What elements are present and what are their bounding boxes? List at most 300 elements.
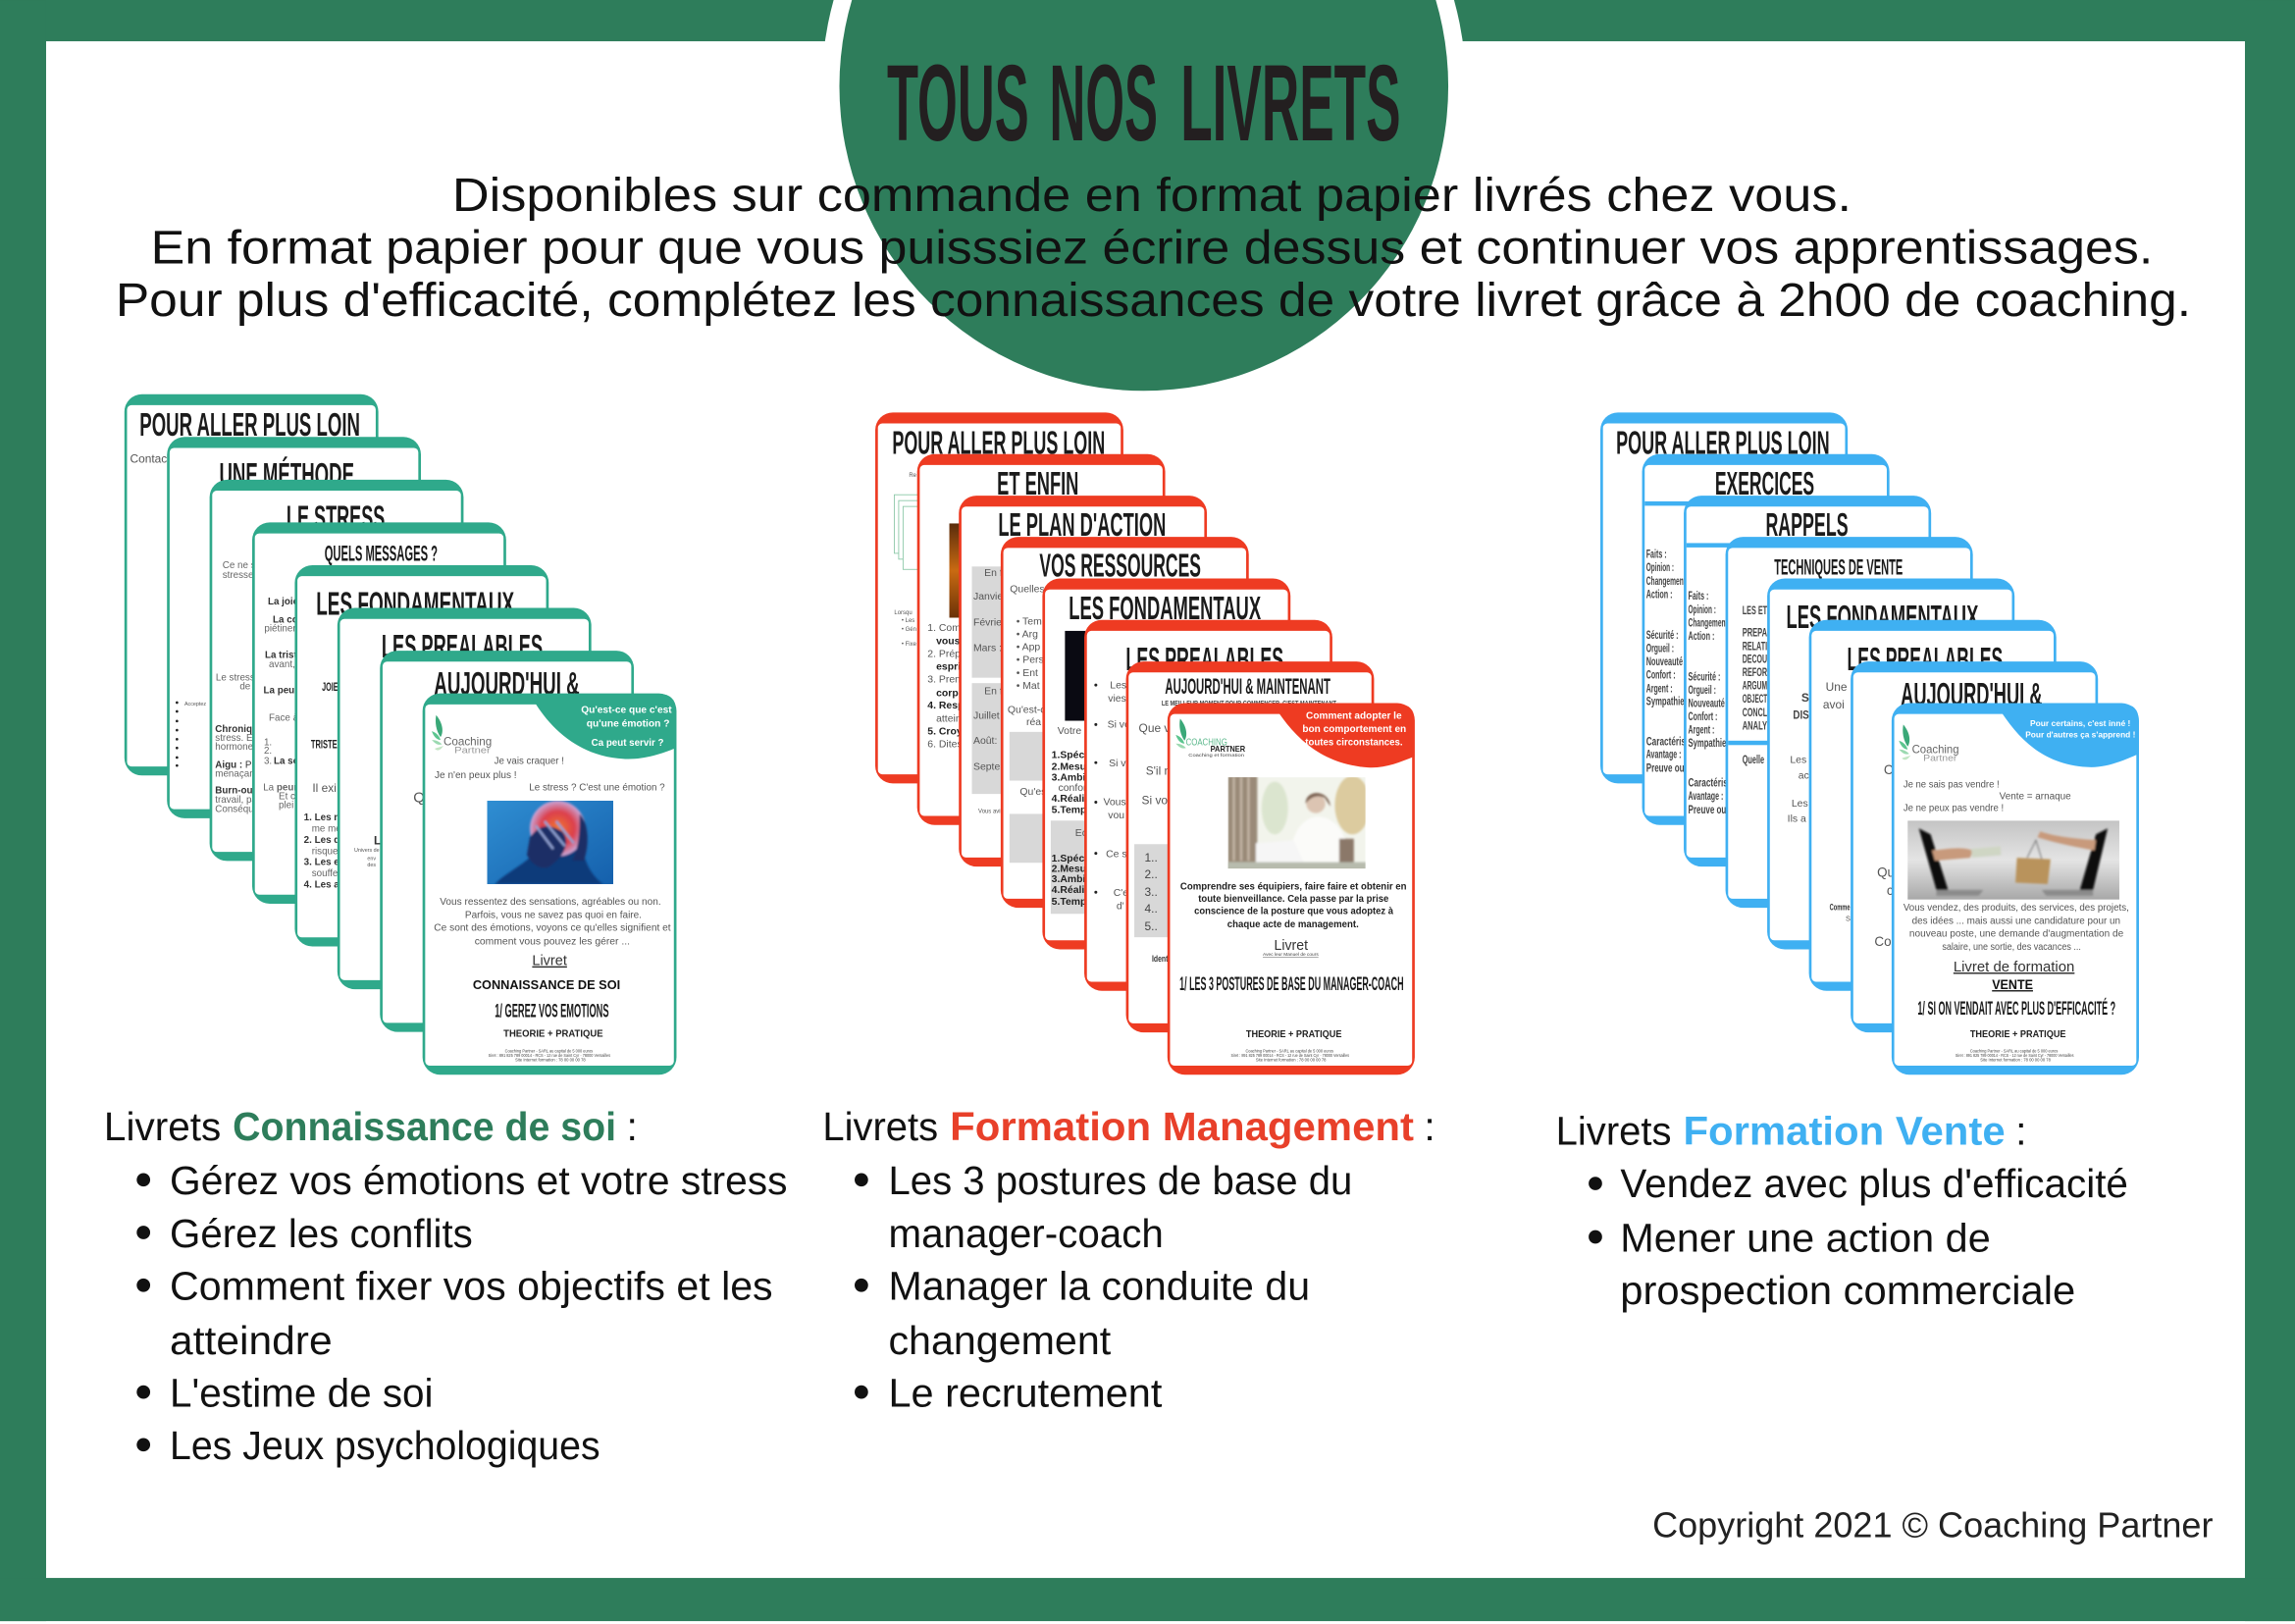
booklet page: Quels messages: La so [274, 757, 299, 767]
booklet page: Les préalables: LES PREALABLES [1125, 641, 1283, 678]
booklet page: Les fondamentaux: Les [1792, 799, 1808, 810]
booklet page: Le plan d'action: Août: [973, 736, 997, 747]
booklet page: Rappels: Opinion : [1689, 602, 1716, 616]
booklet page: Le plan d'action: Septem [973, 761, 1009, 772]
booklet page: Aujourd'hui et maintenant: Que v [1139, 721, 1170, 735]
booklet page: Les préalables: vou [1108, 811, 1124, 821]
booklet page: Les préalables: Si vo [1108, 719, 1130, 730]
booklet page: Les fondamentaux: Il exi [312, 781, 337, 795]
logo: Coaching Partner: Coaching [443, 734, 492, 748]
list heading: Livrets [104, 1104, 221, 1149]
booklet page: Quels messages: 1. [264, 737, 272, 748]
cover tagline: THEORIE + PRATIQUE [1246, 1029, 1341, 1040]
cover description [1180, 881, 1407, 930]
booklet page: Rappels: Argent : [1689, 722, 1714, 736]
booklet page: Le stress: de [239, 682, 251, 693]
list items [888, 1158, 1352, 1416]
booklet page: Les fondamentaux: me me [312, 823, 341, 834]
booklet page: Rappels: Avantage : [1689, 789, 1723, 803]
booklet page: Techniques de vente: REFOR [1743, 665, 1767, 679]
booklet page: Les préalables: Comme [1830, 903, 1851, 913]
cover quotes: Le stress ? C'est une émotion ? [529, 783, 665, 794]
booklet page: Les fondamentaux: 5.Temp [1052, 897, 1086, 908]
list items: Gérez les conflits [170, 1211, 473, 1256]
booklet page: Les préalables: Une [1826, 680, 1848, 694]
booklet page: Quels messages: Face à [269, 712, 299, 723]
booklet page: Rappels: Action : [1689, 629, 1714, 643]
booklet page: Les préalables: vies [1108, 694, 1126, 705]
booklet page: Les fondamentaux [1042, 579, 1290, 950]
list heading: : [626, 1104, 638, 1149]
photo: woman at laptop [1228, 777, 1366, 869]
booklet page: Rappels: Confort : [1689, 709, 1717, 723]
booklet page: Aujourd'hui et maintenant: AUJOURD'HUI & MAINTENANT [1165, 674, 1330, 699]
booklet stack: Connaissance de soi [125, 394, 676, 1074]
booklet page: Les fondamentaux: confor [1059, 783, 1087, 794]
booklet page: Le stress: travail, pa [215, 795, 257, 806]
booklet page: Et enfin: corp [936, 688, 959, 699]
logo: Coaching Partner: Coaching [1912, 743, 1959, 757]
booklet page: Techniques de vente: PREPA [1743, 626, 1767, 640]
list bullets [136, 1173, 150, 1451]
list items: L'estime de soi [170, 1371, 434, 1416]
booklet page: Le stress: Burn-out [215, 786, 256, 797]
cover footer: Coaching Partner - SARL au capital de 5 000 euros [505, 1049, 593, 1054]
booklet page: Le stress: stress. Ep [215, 733, 259, 744]
banner text: bon comportement en [1302, 724, 1406, 735]
list heading [1556, 1109, 2026, 1154]
booklet page: Les fondamentaux [294, 565, 548, 947]
booklet page: Les fondamentaux: LES FONDAMENTAUX [316, 586, 514, 623]
list items: Gérez vos émotions et votre stress [170, 1158, 788, 1203]
booklet page: Le stress: Le stress [216, 673, 255, 684]
cover label: Livret [1263, 938, 1320, 957]
list items: Comment fixer vos objectifs et les [170, 1264, 773, 1309]
cover description: conscience de la posture que vous adoptez à [1194, 907, 1393, 917]
cover footer: Coaching Partner - SARL au capital de 5 000 euros [1970, 1049, 2058, 1054]
booklet page: Et enfin: 3. Pren [927, 675, 961, 686]
booklet page: Rappels: Caractéris [1689, 776, 1728, 790]
booklet page: Les préalables [1084, 620, 1332, 991]
booklet page: Vos ressources: VOS RESSOURCES [1039, 548, 1201, 585]
title: TOUS [887, 43, 1029, 164]
booklet page: Exercices: Faits : [1646, 547, 1667, 560]
logo: Coaching Partner [1899, 724, 1959, 763]
booklet page: Les fondamentaux: Ec [1075, 828, 1087, 839]
booklet page: Exercices: Avantage : [1646, 748, 1682, 761]
list: Connaissance de soi [104, 1104, 788, 1468]
booklet page: Et enfin: 6. Dites [927, 740, 963, 751]
cover footer: Siret : 891 825 789 00014 - RCS - 12 rue de Saint Cyr - 78000 Versailles [1956, 1053, 2073, 1058]
list heading: : [2015, 1109, 2026, 1154]
booklet page: Pour aller plus loin: • Gén [902, 627, 916, 633]
cover description: Comprendre ses équipiers, faire faire et obtenir en [1180, 881, 1407, 892]
cover series name: CONNAISSANCE DE SOI [473, 977, 620, 992]
booklet page: Les préalables: LES PREALABLES [1848, 641, 2003, 678]
booklet page: Rappels: Sécurité : [1689, 670, 1720, 684]
booklet page: Les fondamentaux: 4.Réalis [1052, 794, 1090, 805]
booklet page: Les fondamentaux: Les [1790, 755, 1806, 765]
booklet page: Le plan d'action: LE PLAN D'ACTION [998, 506, 1166, 544]
booklet page: Vos ressources: • Tem [1017, 617, 1042, 628]
cover label: Livret: Livret [1275, 938, 1309, 954]
booklet page: Le plan d'action [959, 496, 1207, 866]
list bullets [1589, 1177, 1602, 1243]
text: 1/ LES 3 POSTURES DE BASE DU MANAGER-COACH [1179, 973, 1404, 995]
booklet page: Aujourd'hui: C [1884, 762, 1894, 777]
cover footer [1231, 1049, 1349, 1062]
list items: Vendez avec plus d'efficacité [1620, 1161, 2128, 1206]
booklet page: Les fondamentaux: ac [1799, 771, 1809, 782]
booklet page: Le stress: menaçant [215, 769, 258, 780]
photo: head in pain with glowing brain [487, 801, 613, 884]
booklet page: Le stress: Chronique [215, 724, 264, 735]
cover description [1904, 903, 2129, 953]
booklet page: Quels messages: Et c' [279, 791, 297, 802]
booklet page: Et enfin: vous [936, 636, 961, 647]
booklet page: Exercices: Changement [1646, 574, 1686, 588]
booklet page: Pour aller plus loin: POUR ALLER PLUS LOIN [1616, 424, 1830, 461]
introduction text: Pour plus d'efficacité, complétez les connaissances de votre livret grâce à 2h00 de coaching. [116, 274, 2191, 327]
booklet page: Pour aller plus loin: • Fixe [902, 642, 917, 648]
list items: Les 3 postures de base du [888, 1158, 1352, 1203]
booklet page: Pour aller plus loin: Contact [130, 451, 171, 465]
booklet page: Aujourd'hui [1851, 661, 2098, 1032]
booklet page: Quels messages: La co [273, 614, 298, 625]
cover footer [1956, 1049, 2073, 1062]
cover description: toute bienveillance. Cela passe par la prise [1198, 894, 1389, 905]
booklet page: Aujourd'hui: Co [1874, 934, 1892, 949]
banner text [581, 705, 672, 749]
booklet page: Les fondamentaux: 1. Les nie [304, 812, 348, 823]
logo: Coaching Partner [432, 715, 492, 755]
booklet page: Pour aller plus loin [875, 412, 1123, 783]
logo: Coaching Partner [1175, 718, 1245, 758]
booklet page: Aujourd'hui et maintenant: Si vo [1142, 794, 1168, 808]
booklet page: Les préalables: C'e [1114, 888, 1128, 899]
booklet page: Vos ressources: • Mat [1017, 681, 1040, 692]
booklet page: Rappels [1684, 496, 1931, 866]
booklet page: Vos ressources: • Ent [1017, 668, 1038, 679]
list: Formation Vente [1556, 1109, 2128, 1313]
booklet page: Quels messages: plei [279, 800, 293, 811]
banner text: Ca peut servir ? [592, 738, 663, 749]
booklet page: Techniques de vente: ANALY [1743, 719, 1767, 733]
booklet page: Techniques de vente: RELATI [1743, 639, 1767, 653]
booklet page: Le stress: LE STRESS [287, 499, 385, 537]
booklet page: Les fondamentaux: 3. Les es [304, 858, 345, 868]
booklet page: Les préalables: Univers de [354, 848, 380, 854]
cover footer: Site Internet formation : 78 00 00 00 78 [1980, 1057, 2052, 1062]
list items [170, 1158, 788, 1468]
booklet page: Pour aller plus loin: POUR ALLER PLUS LOIN [892, 424, 1105, 461]
title [887, 43, 1401, 164]
list heading: : [1424, 1104, 1435, 1149]
booklet page: Les fondamentaux: 1.Spécif [1052, 854, 1091, 864]
booklet page: Les préalables: d' [1117, 902, 1124, 913]
booklet page: Le stress [210, 480, 463, 861]
booklet page: Quels messages [252, 522, 506, 904]
booklet page: Techniques de vente: Quelle [1743, 753, 1764, 766]
list items: Manager la conduite du [888, 1264, 1310, 1309]
list items: changement [888, 1318, 1112, 1363]
booklet page: Exercices: Sécurité : [1646, 628, 1679, 642]
booklet page: Le plan d'action: Mars : [973, 644, 1002, 655]
banner text: Comment adopter le [1306, 710, 1402, 721]
booklet page: Les fondamentaux: 3.Ambi [1052, 874, 1086, 885]
booklet page: Rappels: Orgueil : [1689, 683, 1716, 697]
booklet page: Le stress: stresse [223, 570, 254, 581]
booklet page: Et enfin [917, 454, 1166, 825]
cover label: Livret: Livret [532, 954, 568, 969]
banner text: Pour certains, c'est inné ! [2030, 718, 2130, 728]
booklet page: Exercices: Preuve ou [1646, 761, 1685, 775]
cover footer [489, 1049, 610, 1062]
booklet page: Vos ressources: Quelles [1010, 585, 1045, 596]
cover quotes: Je ne sais pas vendre ! [1904, 780, 2000, 791]
booklet page: Aujourd'hui et maintenant: S'il n [1146, 764, 1171, 778]
cover description: comment vous pouvez les gérer ... [475, 937, 630, 948]
booklet page: Rappels: Sympathie [1689, 736, 1727, 750]
booklet page: Exercices: Opinion : [1646, 560, 1674, 574]
booklet page: Une méthode: Acceptez [184, 702, 206, 707]
list items [1620, 1161, 2128, 1313]
booklet page: Les préalables: des [367, 863, 376, 868]
list items: Mener une action de [1620, 1215, 1991, 1260]
booklet stack: Formation Vente [1600, 412, 2139, 1074]
cover description: Parfois, vous ne savez pas quoi en faire. [465, 911, 642, 921]
booklet page: Rappels: Preuve ou [1689, 803, 1726, 816]
list heading: Formation Vente [1683, 1109, 2006, 1154]
booklet cover: Si on vendait avec plus d'efficacité [1892, 703, 2139, 1074]
booklet page: Vos ressources: • App [1017, 643, 1040, 654]
booklet page: Le plan d'action: Vous avi [978, 810, 1001, 815]
booklet page: Les fondamentaux: 3.Ambiti [1052, 773, 1092, 784]
booklet page: Les fondamentaux: LES FONDAMENTAUX [1069, 590, 1261, 627]
booklet page: Aujourd'hui: Qu [1877, 865, 1895, 880]
booklet page: Quels messages: La joie [268, 597, 299, 607]
booklet page: Et enfin: 4. Resp [927, 701, 964, 711]
booklet page: Les préalables: LES PREALABLES [382, 628, 543, 665]
booklet page: Les fondamentaux: JOIE [322, 680, 339, 694]
booklet page: Exercices: Sympathie [1646, 695, 1685, 708]
cover footer: Site Internet formation : 78 00 00 00 78 [1256, 1057, 1327, 1062]
booklet page: Les fondamentaux: 2.Mesur [1052, 864, 1090, 874]
booklet page: Pour aller plus loin [125, 394, 379, 775]
booklet stack: Formation Management [875, 412, 1415, 1074]
list heading: Connaissance de soi [233, 1104, 616, 1149]
booklet page: Le plan d'action: En f [984, 568, 1003, 579]
booklet cover: Gérez vos émotions: 1/ GEREZ VOS EMOTIONS [495, 1001, 609, 1022]
booklet page: Aujourd'hui: AUJOURD'HUI & [434, 665, 580, 703]
booklet page: Le stress: hormone [215, 742, 254, 753]
cover label: Livret: Avec leur Manuel de cours [1263, 952, 1320, 957]
booklet page: Aujourd'hui et maintenant: 4.. [1145, 902, 1158, 916]
logo: Coaching Partner: Partner [454, 745, 491, 755]
list heading: Formation Management [950, 1104, 1414, 1149]
booklet page: Les fondamentaux: Votre [1058, 726, 1081, 737]
booklet page: Les préalables: S [1846, 914, 1851, 922]
booklet page: Techniques de vente: DECOU [1743, 653, 1767, 666]
cover corner banner [531, 694, 676, 760]
cover footer: Site Internet formation : 78 00 00 00 78 [515, 1057, 586, 1062]
cover corner banner [1998, 705, 2139, 767]
booklet page: Techniques de vente: OBJECT [1743, 692, 1767, 706]
list items: Les Jeux psychologiques [170, 1423, 600, 1468]
booklet page: Exercices: Confort : [1646, 668, 1676, 682]
cover tagline: THEORIE + PRATIQUE [503, 1029, 603, 1040]
booklet page: Rappels: RAPPELS [1765, 506, 1849, 544]
list bullets [855, 1173, 868, 1398]
booklet page: Rappels: Nouveauté [1689, 696, 1725, 709]
booklet page: Les fondamentaux: TRISTE [311, 738, 338, 752]
booklet page: Pour aller plus loin [1600, 412, 1848, 783]
booklet page: Les fondamentaux [1767, 579, 2014, 950]
booklet page: Aujourd'hui et maintenant: 1.. [1145, 851, 1158, 864]
booklet page: Quels messages: 3. [264, 757, 272, 767]
booklet page: Techniques de vente: CONCL [1743, 706, 1767, 719]
banner text [1302, 710, 1406, 748]
booklet page: Aujourd'hui et maintenant: 5.. [1145, 919, 1158, 933]
booklet page: Les préalables: LI [374, 834, 385, 848]
booklet page: Aujourd'hui: Q [413, 790, 425, 806]
booklet page: Techniques de vente: LES ET [1743, 603, 1768, 617]
cover footer: Coaching Partner - SARL au capital de 5 000 euros [1245, 1049, 1333, 1054]
title circle [839, 0, 1448, 391]
booklet page: Exercices: Argent : [1646, 681, 1673, 695]
booklet page: Les préalables: env [367, 857, 376, 863]
booklet page: Les préalables [1809, 620, 2057, 991]
logo: Coaching Partner: Partner [1923, 754, 1956, 763]
booklet page: Les préalables [338, 608, 592, 989]
booklet page: Le plan d'action: Janvier [973, 592, 1007, 602]
booklet page: Les fondamentaux: Ils a [1788, 814, 1806, 825]
booklet page: Et enfin: 1. Com [927, 623, 961, 634]
logo: Coaching Partner: COACHING [1186, 737, 1227, 748]
booklet page: Les fondamentaux: 2.Mesur [1052, 761, 1090, 772]
booklet page: Et enfin: 2. Prép [927, 649, 961, 659]
booklet page: Une méthode: UNE MÉTHODE [219, 456, 354, 494]
booklet page: Le stress: Aigu : Pro [215, 760, 261, 770]
banner text [2025, 718, 2135, 739]
booklet page: Les préalables: Ce s [1106, 849, 1127, 860]
booklet page: Les fondamentaux: LES FONDAMENTAUX [1786, 599, 1979, 636]
banner text: Pour d'autres ça s'apprend ! [2025, 729, 2135, 739]
booklet page: Et enfin: 5. Croy [927, 727, 963, 738]
booklet page: Quels messages: QUELS MESSAGES ? [325, 542, 438, 566]
cover description: Vous ressentez des sensations, agréables ou non. [440, 897, 661, 908]
booklet page: Quels messages: La peur [264, 685, 298, 696]
booklet page: Les fondamentaux: risque [312, 847, 339, 858]
title: NOS [1050, 43, 1158, 164]
cover description: Vous vendez, des produits, des services, des projets, [1904, 903, 2129, 914]
booklet page: Techniques de vente: TECHNIQUES DE VENTE [1774, 554, 1903, 579]
cover tagline: THEORIE + PRATIQUE [1970, 1029, 2066, 1040]
white ring around the title circle [822, 0, 1466, 408]
booklet page: Les fondamentaux: 4. Les ac [304, 880, 345, 891]
list heading: Livrets [1556, 1109, 1672, 1154]
booklet page: Vos ressources: Qu'est-c [1008, 705, 1045, 715]
booklet page: Pour aller plus loin: POUR ALLER PLUS LOIN [139, 406, 360, 444]
banner text: Qu'est-ce que c'est [581, 705, 672, 715]
logo: Coaching Partner: Coaching et formation [1188, 753, 1245, 758]
booklet page: Aujourd'hui: c [1887, 883, 1894, 898]
booklet page: Le plan d'action: Février [973, 617, 1006, 628]
booklet page: Exercices: Action : [1646, 587, 1673, 601]
cover description: salaire, une sortie, des vacances ... [1942, 942, 2081, 953]
booklet page: Les fondamentaux: DIS [1793, 707, 1809, 721]
cover description: nouveau poste, une demande d'augmentation de [1909, 929, 2123, 940]
booklet page: Exercices: EXERCICES [1715, 465, 1814, 502]
booklet page: Quels messages: La peur [263, 783, 297, 794]
booklet page: Aujourd'hui et maintenant: 3.. [1145, 885, 1158, 899]
list items: prospection commerciale [1620, 1268, 2075, 1313]
cover description: Ce sont des émotions, voyons ce qu'elles signifient et [434, 923, 671, 934]
booklet page: Aujourd'hui et maintenant [1126, 661, 1374, 1032]
cover description [434, 897, 671, 948]
booklet page: Exercices: Caractéris [1646, 734, 1686, 748]
booklet page: Vos ressources [1001, 537, 1249, 908]
booklet page: Les fondamentaux: 1.Spécif [1052, 751, 1091, 761]
cover quotes [435, 757, 665, 794]
booklet page: Quels messages: piétiner [264, 624, 296, 635]
text: LIVRETS [1180, 43, 1401, 164]
booklet page: Le stress: Conséque [215, 804, 260, 814]
booklet page: Aujourd'hui et maintenant: 2.. [1145, 867, 1158, 881]
booklet page: Exercices: Nouveauté [1646, 655, 1683, 668]
booklet page: Techniques de vente [1726, 537, 1973, 908]
booklet page: Aujourd'hui et maintenant: LE MEILLEUR MOMENT POUR COMMENCER, C'EST MAINTENANT [1162, 699, 1336, 707]
booklet page: Vos ressources: Qu'es [1019, 787, 1046, 798]
banner text: toutes circonstances. [1305, 737, 1403, 748]
booklet page: Le plan d'action: Juillet [973, 710, 1000, 721]
list heading: Livrets [822, 1104, 938, 1149]
booklet page: Vos ressources: • Pers [1017, 655, 1044, 666]
booklet page: Les préalables: Vous [1103, 797, 1126, 808]
introduction text [116, 169, 2191, 327]
booklet page: Les préalables: avoi [1823, 698, 1845, 711]
booklet cover: Gérez vos émotions [423, 694, 676, 1074]
introduction text: En format papier pour que vous puisssiez écrire dessus et continuer vos apprentissages. [151, 222, 2153, 275]
booklet page: Pour aller plus loin: Lorsqu [894, 610, 913, 616]
cover quotes: Je ne peux pas vendre ! [1904, 803, 2004, 813]
booklet page: Et enfin: attein [936, 713, 962, 724]
booklet page: Pour aller plus loin: • Les [902, 618, 914, 624]
list items: manager-coach [888, 1211, 1164, 1256]
booklet page: Les fondamentaux: 4.Réalis [1052, 885, 1090, 896]
booklet page: Rappels: Faits : [1689, 589, 1708, 602]
booklet page: Aujourd'hui [380, 651, 634, 1032]
booklet page: Et enfin: ET ENFIN [997, 465, 1078, 502]
cover footer: Siret : 891 825 789 00014 - RCS - 12 rue de Saint Cyr - 78000 Versailles [1231, 1053, 1349, 1058]
booklet page: Vos ressources: • Arg [1017, 630, 1038, 641]
booklet page: Les fondamentaux: 5.Temps [1052, 806, 1092, 816]
cover footer: Siret : 891 825 789 00014 - RCS - 12 rue de Saint Cyr - 78000 Versailles [489, 1053, 610, 1058]
booklet page: Les fondamentaux: 2. Les du [304, 835, 345, 846]
booklet page: Exercices: Orgueil : [1646, 642, 1674, 655]
cover series name: VENTE [1992, 977, 2033, 992]
booklet page: Une méthode [167, 437, 421, 818]
introduction text: Disponibles sur commande en format papier livrés chez vous. [452, 169, 1852, 222]
copyright: Copyright 2021 © Coaching Partner [1652, 1505, 2214, 1545]
booklet page: Techniques de vente: ARGUM [1743, 679, 1767, 693]
booklet page: Aujourd'hui et maintenant: Ident [1152, 954, 1168, 964]
logo: Coaching Partner: PARTNER [1211, 745, 1245, 754]
booklet page: Les préalables: Si vo [1109, 759, 1132, 769]
banner text: qu'une émotion ? [587, 718, 669, 729]
booklet page: Et enfin: espri [936, 662, 961, 673]
booklet page: Quels messages: La trist [265, 651, 297, 661]
